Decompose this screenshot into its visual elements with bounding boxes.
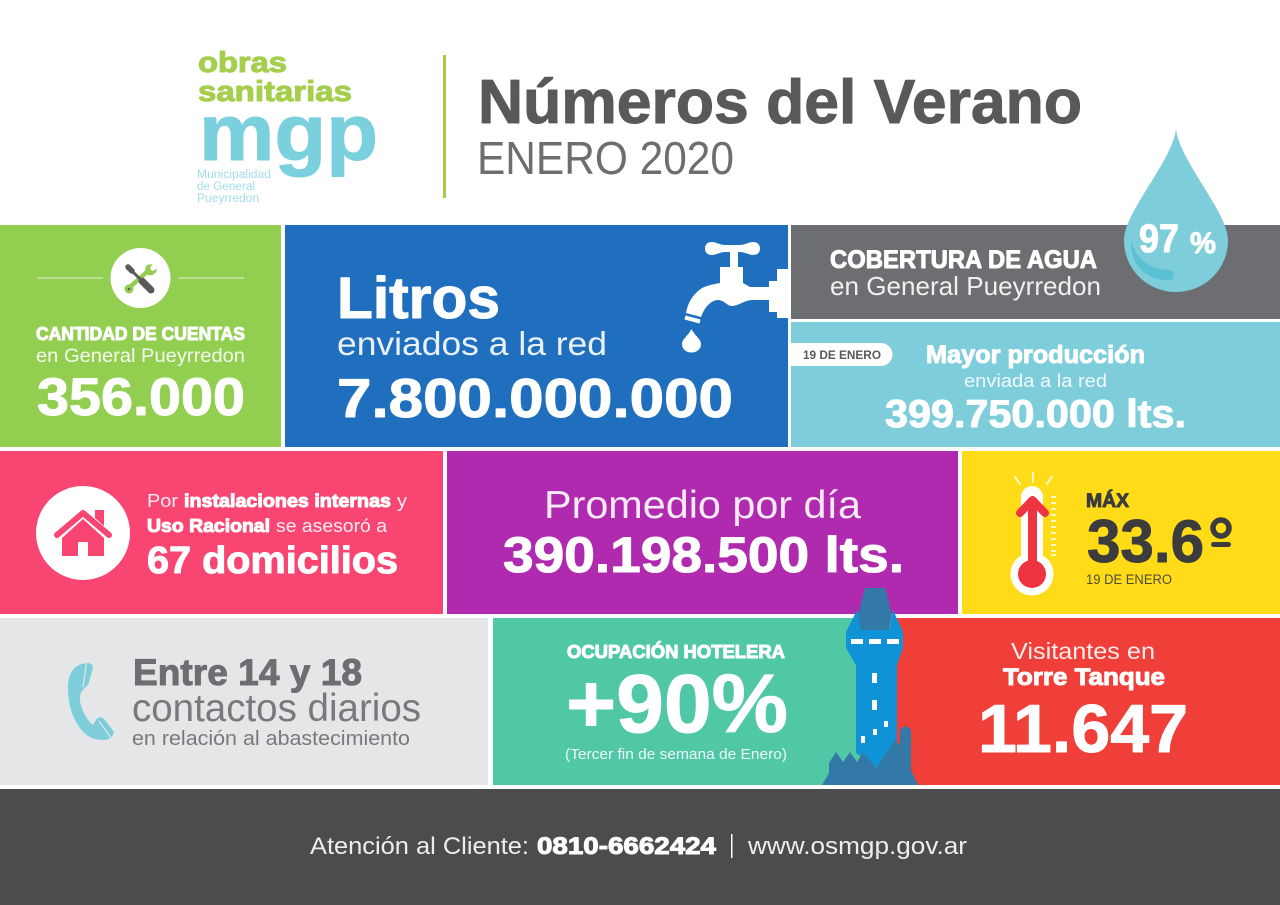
panel: contactos diarios: en relación al abastecimiento <box>132 727 410 750</box>
panel: cobertura de agua: COBERTURA DE AGUA <box>830 246 1097 274</box>
icon: phone <box>68 663 114 740</box>
panel: cobertura de agua <box>791 225 1280 319</box>
panel: temperatura máxima <box>962 451 1280 614</box>
panel: domicilios <box>0 451 443 614</box>
panel: temperatura máxima: 33.6 <box>1087 508 1204 575</box>
icon: tools <box>110 248 170 308</box>
panel: mayor producción: Mayor producción <box>926 341 1145 369</box>
panel: domicilios: instalaciones internas <box>184 490 391 511</box>
panel: litros: enviados a la red <box>337 325 607 362</box>
panel: promedio por día: Promedio por día <box>544 484 861 527</box>
degree mark <box>1211 520 1231 547</box>
panel: visitantes torre tanque: Visitantes en <box>1011 638 1155 664</box>
icon: torre tanque <box>822 588 918 785</box>
footer: Atención al Cliente: <box>310 833 529 860</box>
panel: ocupación hotelera <box>493 618 903 785</box>
panel: litros: 7.800.000.000 <box>337 367 733 429</box>
panel: domicilios: 67 domicilios <box>147 540 398 582</box>
panel: visitantes torre tanque: Torre Tanque <box>1003 664 1165 691</box>
panel: domicilios: y <box>397 490 408 511</box>
panel: contactos diarios <box>0 618 488 785</box>
panel: promedio por día <box>447 451 958 614</box>
label: 19 de enero pill <box>791 343 892 366</box>
panel: temperatura máxima: MÁX <box>1086 489 1129 512</box>
panel: temperatura máxima: 19 DE ENERO <box>1086 572 1172 587</box>
title: ENERO 2020 <box>477 132 734 184</box>
panel: ocupación hotelera: OCUPACIÓN HOTELERA <box>567 641 785 662</box>
panel: ocupación hotelera: (Tercer fin de semana de Enero) <box>565 746 787 763</box>
icon: house <box>36 486 130 580</box>
panel: contactos diarios: Entre 14 y 18 <box>133 652 362 693</box>
panel: cantidad de cuentas <box>0 225 281 447</box>
panel: litros <box>285 225 788 447</box>
footer <box>0 789 1280 905</box>
logo: obras sanitarias mgp: Municipalidad <box>197 169 271 181</box>
icon: water drop 97%: 97 <box>1139 217 1179 261</box>
panel: cantidad de cuentas: en General Pueyrredon <box>36 345 245 367</box>
footer: www.osmgp.gov.ar <box>747 833 967 860</box>
logo: obras sanitarias mgp: obras <box>198 47 287 79</box>
panel: domicilios: se asesoró a <box>276 515 388 536</box>
panel: cantidad de cuentas: 356.000 <box>37 368 245 427</box>
panel: cobertura de agua: en General Pueyrredon <box>830 271 1101 301</box>
icon: water drop 97% <box>1124 129 1228 292</box>
panel: visitantes torre tanque <box>897 618 1280 785</box>
panel: visitantes torre tanque: 11.647 <box>978 691 1188 767</box>
panel: domicilios: Uso Racional <box>147 515 270 536</box>
panel: ocupación hotelera: +90% <box>566 657 788 750</box>
title <box>477 68 1082 184</box>
panel: contactos diarios: contactos diarios <box>132 687 421 730</box>
footer: 0810-6662424 <box>537 833 717 860</box>
logo: obras sanitarias mgp: sanitarias <box>198 76 352 108</box>
icon: water drop 97%: % <box>1190 227 1216 260</box>
panel: mayor producción: 399.750.000 lts. <box>885 393 1186 436</box>
icon: thermometer <box>1010 473 1056 596</box>
panel: domicilios: Por <box>147 490 178 511</box>
logo: obras sanitarias mgp: Pueyrredon <box>197 193 259 205</box>
label: 19 de enero pill: 19 DE ENERO <box>803 350 881 362</box>
icon: water tap <box>682 242 788 352</box>
panel: litros: Litros <box>337 266 500 331</box>
title: Números del Verano <box>478 68 1082 137</box>
panel: mayor producción <box>791 322 1280 447</box>
logo: obras sanitarias mgp: mgp <box>199 88 378 177</box>
logo: obras sanitarias mgp: de General <box>197 181 255 193</box>
panel: mayor producción: enviada a la red <box>964 370 1107 391</box>
logo: obras sanitarias mgp <box>197 47 378 205</box>
panel: cantidad de cuentas: CANTIDAD DE CUENTAS <box>36 324 245 344</box>
panel: promedio por día: 390.198.500 lts. <box>503 527 904 583</box>
